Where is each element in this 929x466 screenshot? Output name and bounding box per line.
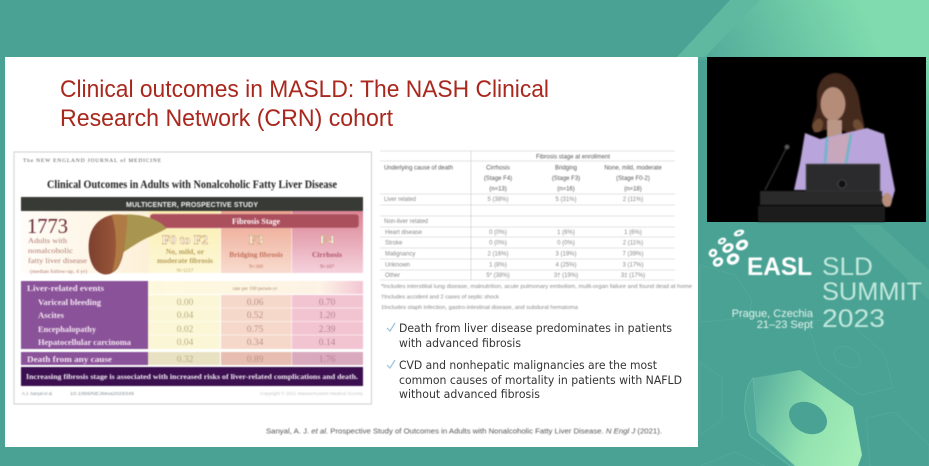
table footnotes: *Includes interstitial lung disease, malnutrition, acute pulmonary embolism, multi-organ failure and found dead at home [381, 284, 692, 290]
table body: 3 (17%) [622, 262, 644, 268]
rate values: 0.04 [177, 311, 194, 321]
table body: 2 (11%) [623, 197, 643, 203]
logo: EASL SLD Summit 2023 [707, 228, 922, 333]
video feed: speaker at podium [707, 57, 926, 222]
event place and date: Prague, Czechia [732, 308, 814, 320]
table body: 5 (38%) [487, 197, 509, 203]
table body: 0 (0%) [557, 240, 575, 246]
row labels: Variceal bleeding [38, 298, 101, 307]
table header: None, mild, moderate [604, 166, 662, 172]
rate values: 0.70 [319, 298, 336, 308]
table body: Malignancy [385, 252, 415, 258]
rate cells [148, 281, 363, 365]
fibrosis stage header: Fibrosis Stage [232, 217, 280, 226]
table body: 1 (8%) [489, 262, 507, 268]
title: Clinical outcomes in MASLD: The NASH Clinical [60, 76, 549, 103]
study design banner: MULTICENTER, PROSPECTIVE STUDY [126, 202, 258, 209]
event name: 2023 [822, 305, 885, 333]
cohort size: (median follow-up, 4 yr) [30, 270, 87, 275]
table body: 3 (19%) [555, 252, 577, 258]
table footnotes: ‡Includes staph infection, gastro-intestinal disease, and subdural hematoma [381, 305, 579, 311]
table header: (Stage F0-2) [616, 176, 650, 182]
takeaway: CVD and malignancies: CVD and nonhepatic malignancies are the most [399, 358, 657, 372]
cohort size: Adults with [28, 236, 67, 245]
fibrosis stage columns: N=1217 [177, 269, 194, 274]
table header: Underlying cause of death [384, 166, 453, 172]
table header: (Stage F3) [552, 176, 580, 182]
fibrosis stage columns: F4 [320, 232, 335, 247]
microphone [765, 144, 790, 190]
icon: hex nuts cluster [707, 228, 750, 269]
rate values: 0.06 [247, 298, 264, 308]
rate values: 2.39 [319, 325, 336, 335]
table body: 5 (31%) [555, 197, 577, 203]
rate values: 0.14 [319, 338, 336, 348]
rate values: 0.75 [247, 325, 264, 335]
table body: Heart disease [385, 230, 423, 236]
table body: 1 (6%) [557, 230, 575, 236]
table body: 2 (16%) [487, 252, 509, 258]
fibrosis stage columns [149, 211, 363, 274]
title: Research Network (CRN) cohort [60, 105, 393, 132]
event name: SUMMIT [822, 278, 922, 306]
rate values: 0.32 [177, 355, 194, 365]
table body: 7 (39%) [622, 252, 644, 258]
EASL wordmark: EASL [747, 253, 812, 281]
table body: 4 (25%) [555, 262, 577, 268]
key takeaways [387, 321, 682, 401]
table header: (n=13) [489, 186, 507, 192]
table body: Non-liver related [384, 219, 428, 225]
cohort size [21, 211, 149, 275]
speaker [794, 73, 895, 207]
table body: 1 (6%) [624, 230, 642, 236]
table body: 3‡ (17%) [621, 273, 645, 279]
rate values: 1.20 [319, 311, 336, 321]
abstract footer: Copyright © 2021 Massachusetts Medical Society [260, 390, 364, 396]
table header: (n=18) [624, 186, 642, 192]
fibrosis stage columns: F3 [249, 232, 264, 247]
journal name: The NEW ENGLAND JOURNAL of MEDICINE [23, 157, 162, 164]
fibrosis stage columns: N=369 [249, 265, 263, 270]
event name [822, 253, 922, 333]
rate values [177, 298, 336, 365]
table body: Stroke [385, 240, 403, 246]
table body: 2 (11%) [623, 240, 643, 246]
table body: 3† (19%) [554, 273, 578, 279]
citation: Sanyal, A. J. et al. Prospective Study of Outcomes in Adults with Nonalcoholic Fatty Liver Disease. N Engl J (2021). [266, 426, 662, 436]
conclusion banner: Increasing fibrosis stage is associated with increased risks of liver-related complications and death. [26, 372, 358, 381]
abstract footer: 10.1056/NEJMoa2029349 [70, 391, 135, 396]
rate values: 1.76 [319, 355, 336, 365]
cohort size: nonalcoholic [28, 246, 74, 255]
liver illustration [89, 214, 167, 275]
table header: Fibrosis stage at enrollment [536, 154, 610, 160]
row labels: Encephalopathy [38, 325, 96, 334]
slide: white presentation panel [5, 57, 698, 447]
takeaway: CVD and malignancies: without advanced fibrosis [399, 387, 540, 401]
table body: Liver related [384, 197, 416, 203]
rate values: 0.52 [247, 311, 264, 321]
table header: Bridging [555, 166, 577, 172]
abstract heading: Clinical Outcomes in Adults with Nonalcoholic Fatty Liver Disease [47, 179, 337, 191]
event place and date [732, 308, 814, 331]
table body: Unknown [385, 262, 410, 268]
event place and date: 21–23 Sept [757, 319, 813, 331]
rate values: 0.00 [177, 298, 194, 308]
row labels [21, 281, 148, 365]
table header: Cirrhosis [486, 166, 510, 172]
table body: 5* (38%) [486, 273, 510, 279]
row labels: Liver-related events [27, 283, 105, 293]
icon: large green hex nut [745, 370, 862, 466]
fibrosis stage header [150, 214, 359, 228]
takeaway: liver disease deaths: with advanced fibrosis [399, 336, 521, 350]
rate unit: rate per 100 person-yr [233, 287, 277, 292]
table body: Other [385, 273, 400, 279]
panel: causes of death table [380, 151, 692, 311]
title [60, 76, 549, 132]
rate values: 0.89 [247, 355, 264, 365]
rate values: 0.02 [177, 325, 194, 335]
table footnotes: †Includes accident and 2 cases of septic shock [381, 294, 499, 300]
fibrosis stage columns: Cirrhosis [312, 250, 342, 259]
panel: NEJM visual abstract [14, 152, 372, 404]
row labels: Hepatocellular carcinoma [38, 338, 131, 347]
table header [384, 154, 662, 192]
table footnotes [381, 284, 692, 311]
panel: event rate table [21, 281, 363, 365]
event name: SLD [822, 253, 873, 281]
fibrosis stage columns: moderate fibrosis [157, 256, 213, 265]
row labels: Death from any cause [27, 354, 112, 364]
takeaway: liver disease deaths: Death from liver disease predominates in patients [399, 321, 672, 335]
table body: 0 (0%) [489, 230, 507, 236]
table header: (n=16) [557, 186, 575, 192]
cohort size: fatty liver disease [28, 256, 88, 265]
table header: (Stage F4) [484, 176, 512, 182]
rate values: 0.04 [177, 338, 194, 348]
table body [384, 197, 645, 279]
table body: 0 (0%) [489, 240, 507, 246]
cohort size: 1773 [27, 214, 68, 238]
row labels: Ascites [38, 311, 64, 320]
fibrosis stage columns: N=167 [320, 265, 334, 270]
rate values: 0.34 [247, 338, 264, 348]
conclusion banner [21, 367, 363, 386]
fibrosis stage columns: No, mild, or [166, 247, 205, 256]
laptop [806, 164, 880, 191]
abstract footer: A.J. Sanyal et al. [22, 391, 53, 396]
fibrosis stage columns: Bridging fibrosis [229, 250, 283, 259]
fibrosis stage columns: F0 to F2 [162, 232, 208, 247]
study design banner [21, 197, 363, 211]
takeaway: CVD and malignancies: common causes of mortality in patients with NAFLD [399, 373, 682, 387]
abstract footer [22, 390, 364, 396]
podium [758, 191, 885, 222]
takeaway: liver disease deaths [387, 321, 672, 350]
takeaway: CVD and malignancies [387, 358, 682, 401]
